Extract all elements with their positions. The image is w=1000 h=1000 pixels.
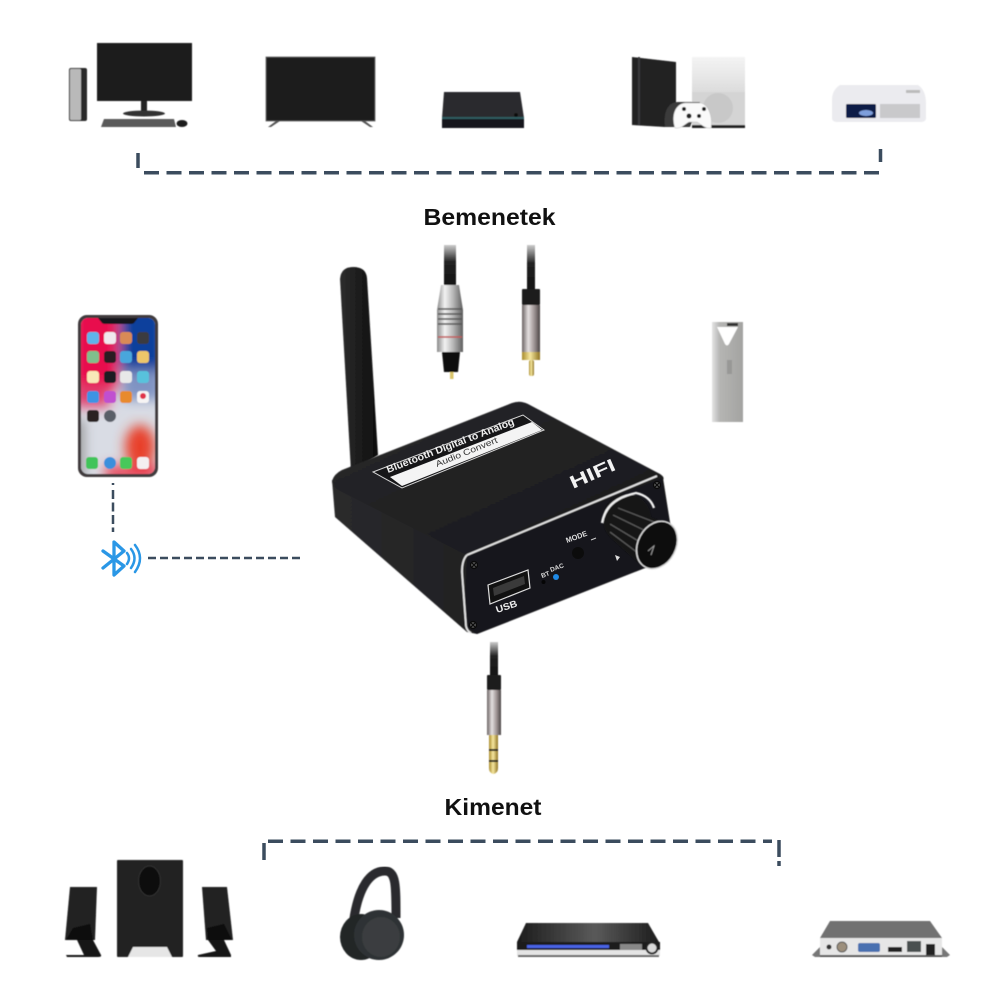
icon: headphones (340, 871, 404, 960)
top label plate (373, 415, 544, 488)
icon: desktop computer (69, 43, 192, 127)
icon: USB flash drive (712, 322, 743, 422)
HIFI mark: HIFI (566, 455, 618, 493)
icon: optical cable (437, 245, 463, 379)
antenna (340, 267, 378, 472)
status LEDs: DAC (549, 562, 565, 574)
status LEDs (540, 562, 565, 584)
icon: RCA cable (522, 245, 540, 376)
mode button: MODE (565, 529, 588, 545)
icon: bluetooth signal (103, 542, 140, 575)
mode button (565, 529, 620, 561)
screws (470, 482, 660, 628)
device body (332, 402, 672, 634)
phone wallpaper (80, 317, 156, 475)
icon: 3.5mm audio jack (487, 642, 501, 774)
top label plate: Audio Convert (434, 435, 500, 469)
icon: projector (832, 85, 926, 122)
USB port: USB (495, 599, 519, 616)
icon: DVD player (517, 923, 660, 957)
icon: smartphone (77, 314, 159, 478)
icon: speaker set (65, 860, 233, 957)
heading: output: Kimenet (444, 794, 542, 820)
connector: phone to bluetooth (112, 483, 114, 532)
icon: game consoles (632, 57, 745, 128)
heading: inputs: Bemenetek (424, 204, 556, 230)
connector: top dashed bracket (138, 149, 882, 173)
top label plate: Bluetooth Digital to Analog (385, 417, 516, 476)
device: Bluetooth digital to analog converter (332, 267, 686, 634)
connector: bottom dashed bracket (264, 840, 779, 866)
icon: television (266, 57, 375, 127)
USB port (488, 570, 530, 616)
connector: bluetooth to device (148, 557, 302, 559)
status LEDs: BT (540, 570, 551, 580)
volume knob (602, 493, 686, 576)
icon: video decoder box (812, 921, 950, 957)
icon: set-top box (442, 92, 524, 128)
phone app grid (86, 332, 149, 469)
